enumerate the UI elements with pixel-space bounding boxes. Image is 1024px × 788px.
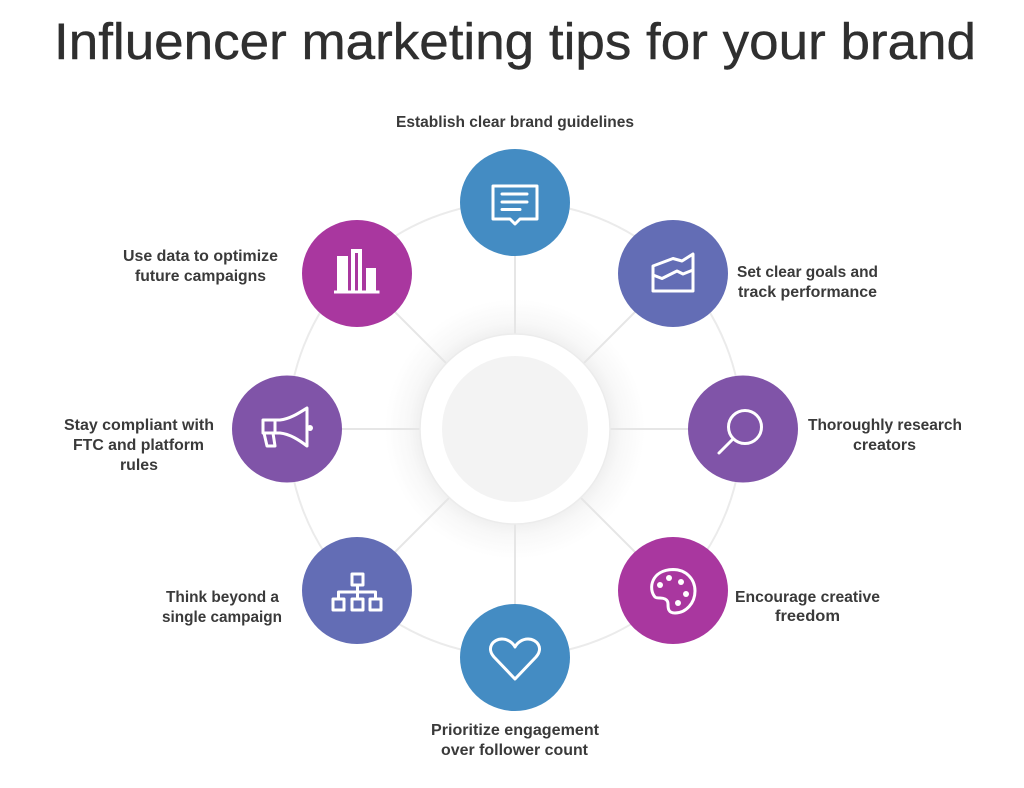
title: Influencer marketing tips for your brand bbox=[54, 13, 976, 70]
node: engagement bbox=[460, 604, 570, 711]
icon: area chart bbox=[653, 254, 693, 291]
node: creative freedom bbox=[618, 537, 728, 644]
label: data optimization: Use data to optimize bbox=[123, 248, 278, 265]
label: compliance: Stay compliant with bbox=[64, 417, 214, 434]
label: research line two: creators bbox=[853, 437, 916, 454]
node: brand guidelines bbox=[460, 149, 570, 256]
label: data optimization line two: future campaigns bbox=[135, 268, 266, 285]
node: research bbox=[688, 376, 798, 482]
label: compliance line three: rules bbox=[120, 457, 158, 474]
label: beyond single campaign: Think beyond a bbox=[166, 589, 279, 606]
icon: bar chart bbox=[334, 249, 380, 294]
label: creative freedom line two: freedom bbox=[775, 608, 840, 625]
icon: megaphone bbox=[263, 408, 313, 446]
node: compliance bbox=[232, 376, 342, 482]
label: beyond single campaign line two: single campaign bbox=[162, 609, 282, 626]
icon: org chart bbox=[333, 574, 381, 610]
icon: message document bbox=[493, 186, 537, 224]
label: goals: Set clear goals and bbox=[737, 264, 878, 281]
label: engagement line two: over follower count bbox=[441, 742, 589, 759]
label: compliance line two: FTC and platform bbox=[73, 437, 204, 454]
label: engagement: Prioritize engagement bbox=[431, 722, 600, 739]
label: brand guidelines: Establish clear brand guidelines bbox=[396, 114, 634, 131]
icon: palette bbox=[652, 570, 695, 613]
node: goals bbox=[618, 220, 728, 327]
icon: magnifier bbox=[719, 410, 762, 453]
node: data optimization bbox=[302, 220, 412, 327]
icon: heart bbox=[490, 639, 540, 679]
label: creative freedom: Encourage creative bbox=[735, 589, 880, 606]
label: goals line two: track performance bbox=[738, 284, 877, 301]
node: beyond single campaign bbox=[302, 537, 412, 644]
label: research: Thoroughly research bbox=[808, 417, 962, 434]
central hub diagram bbox=[287, 202, 743, 656]
